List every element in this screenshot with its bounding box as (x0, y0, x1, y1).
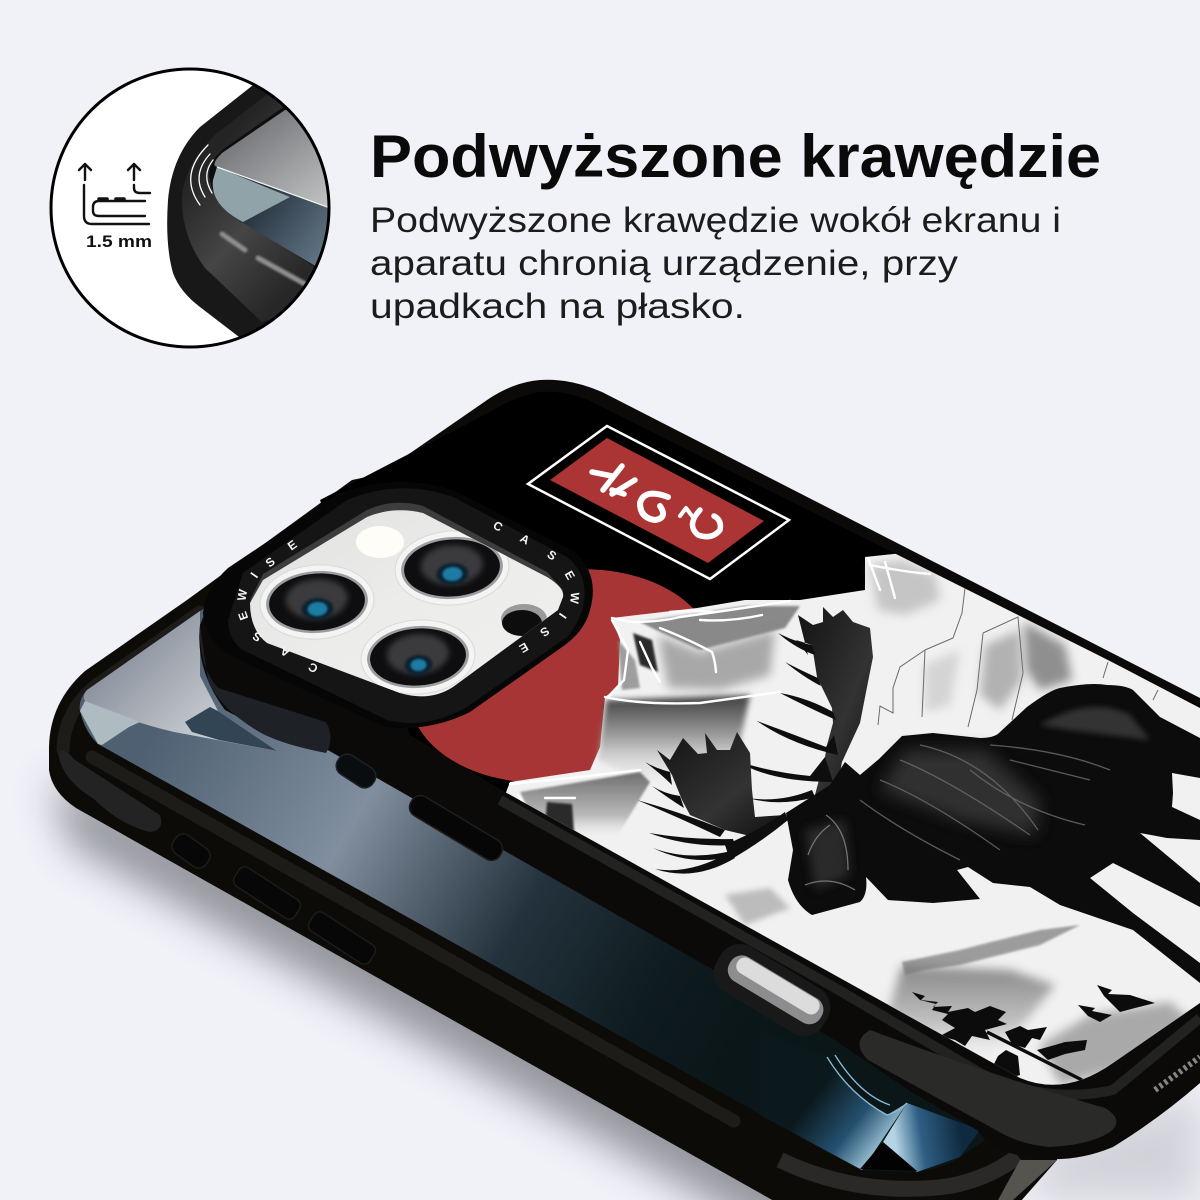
icon: 1.5 mm raised lip diagram (79, 164, 150, 224)
camera: ring brand text: A (518, 531, 532, 548)
camera: lens bottom (360, 620, 476, 694)
camera: ring brand text: W (234, 588, 250, 602)
description text (370, 201, 1061, 326)
front phone: case body (199, 380, 1200, 1159)
front phone: side button long (406, 792, 506, 864)
back phone: side buttons (168, 830, 378, 967)
back phone (screen side up) (49, 470, 1057, 1200)
artwork: moose fur sheen (805, 707, 1150, 890)
artwork: moose upper antler (737, 607, 873, 802)
camera: lens left (260, 564, 374, 640)
back phone: blue wallpaper arcs (760, 1030, 907, 1170)
artwork: white cliff ridges (508, 556, 932, 803)
back phone: wallpaper top grey (84, 611, 277, 751)
logo badge (528, 426, 789, 579)
camera: ring brand text: C (306, 659, 320, 676)
camera: ring brand text: S (545, 547, 559, 563)
back phone: corner rim bottom (780, 1156, 1018, 1189)
back phone: wallpaper light wedge (80, 701, 140, 745)
label: 1.5 mm: 1.5 mm (86, 233, 152, 251)
front phone: back panel artwork (300, 380, 1200, 1100)
camera: ring brand text: W (567, 592, 582, 605)
camera: ring brand text: C (491, 518, 505, 535)
logo mark (592, 466, 720, 537)
camera: ring brand text: A (278, 643, 292, 660)
camera: ring brand text: E (562, 568, 578, 582)
camera module (200, 482, 593, 753)
camera: ring brand text: E (235, 610, 251, 622)
camera: lens top (394, 530, 510, 606)
artwork: moose body (786, 684, 1200, 983)
camera: ring brand text: E (285, 537, 299, 553)
camera: ring brand text: I (556, 610, 569, 621)
artwork: mountain shading (510, 558, 1190, 1085)
inset: raised-edge arcs (191, 145, 213, 205)
camera: bumper carbon block (200, 625, 330, 753)
camera: ring brand text (234, 518, 582, 676)
front phone: rim light band (500, 800, 1200, 1095)
camera: brand ring (228, 488, 585, 723)
inset: screen light streak (217, 167, 330, 208)
camera: flash (356, 526, 404, 558)
artwork: white mountains (505, 553, 1200, 1100)
description text: Podwyższone krawędzie wokół ekranu i (370, 201, 1061, 240)
camera: inner wall (250, 503, 563, 693)
camera: glass plate with lenses (250, 510, 564, 696)
front phone: small side switch (332, 750, 380, 792)
camera: outer ring (203, 482, 593, 728)
artwork: cliff outlines (878, 588, 1158, 728)
artwork: red sun (418, 569, 694, 782)
artwork: pine trees (912, 985, 1155, 1080)
inset circle: raised edge close-up (51, 69, 340, 347)
description text: aparatu chronią urządzenie, przy (370, 244, 959, 283)
title: Podwyższone krawędzie (370, 123, 1101, 190)
front phone: bottom speaker grille (1155, 1057, 1200, 1090)
back phone: rim highlight (63, 612, 734, 1121)
inset: highlights on the bumper (222, 234, 305, 284)
camera: ring brand text: S (263, 554, 278, 570)
camera: ring brand text: S (538, 624, 552, 640)
artwork: moose lower antler (637, 732, 788, 874)
front phone: carbon corner grip (859, 1030, 1116, 1147)
description text: upadkach na płasko. (370, 287, 745, 326)
camera: ring brand text: E (517, 640, 531, 656)
front phone (case back up) (199, 380, 1200, 1159)
camera: ring brand text: I (248, 570, 261, 581)
back phone: screen (80, 520, 985, 1172)
phones drop shadow (50, 780, 1000, 1200)
back phone: metal side sliver (998, 1160, 1057, 1200)
inset: phone corner photo (167, 86, 328, 337)
camera: ring brand text: S (250, 629, 264, 645)
camera: sensor (501, 604, 547, 636)
front phone: metal button (705, 936, 839, 1044)
back phone: wallpaper navy shape (185, 707, 277, 751)
back phone: carbon corner patch (58, 750, 161, 832)
